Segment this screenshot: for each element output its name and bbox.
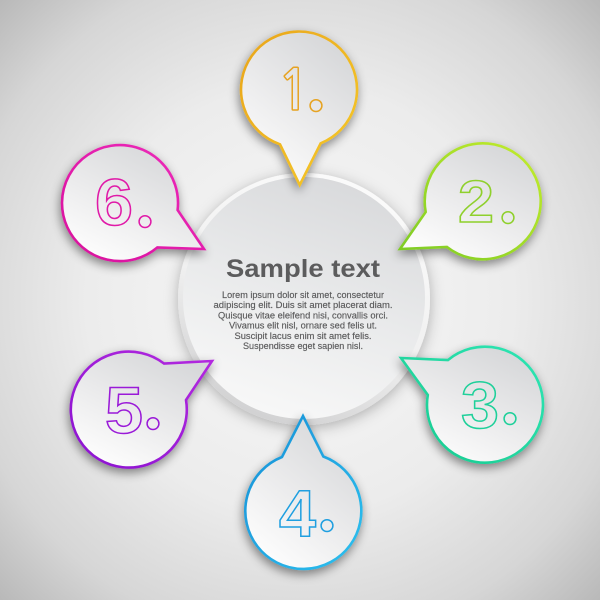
bubble 4: blue <box>245 416 361 569</box>
text block: Quisque vitae eleifend nisi, convallis orci. <box>218 310 388 320</box>
number 6 <box>95 137 158 248</box>
number 2: 2 <box>458 169 494 235</box>
text block: Suspendisse eget sapien nisl. <box>243 341 363 351</box>
number 6: . <box>132 137 158 248</box>
text block: Suscipit lacus enim sit amet felis. <box>234 331 372 341</box>
number 3: 3 <box>461 368 499 442</box>
number 3 <box>461 334 522 445</box>
bubble 2: green <box>400 133 541 259</box>
number 5: 5 <box>105 373 143 447</box>
number 4 <box>279 441 340 552</box>
number 4: . <box>314 441 340 552</box>
panel: central circle <box>178 173 430 425</box>
number 4: 4 <box>279 476 316 550</box>
number 2: . <box>496 133 520 244</box>
number 6: 6 <box>95 165 133 239</box>
number 5 <box>105 339 166 450</box>
number 3: . <box>498 334 522 445</box>
text block <box>214 290 392 351</box>
bubble 3: teal <box>401 334 543 463</box>
number 1: . <box>304 21 328 132</box>
text block: Lorem ipsum dolor sit amet, consectetur <box>222 290 384 300</box>
text block: Vivamus elit nisl, ornare sed felis ut. <box>229 321 377 331</box>
bubble 1: orange <box>241 21 357 185</box>
number 5: . <box>140 339 166 450</box>
bubble 5: purple <box>71 339 212 468</box>
number 1: 1 <box>277 64 311 119</box>
number 2 <box>458 133 520 244</box>
text block: adipiscing elit. Duis sit amet placerat diam. <box>214 300 392 310</box>
bubble 6: magenta <box>62 137 204 261</box>
heading: Sample text <box>226 255 381 283</box>
